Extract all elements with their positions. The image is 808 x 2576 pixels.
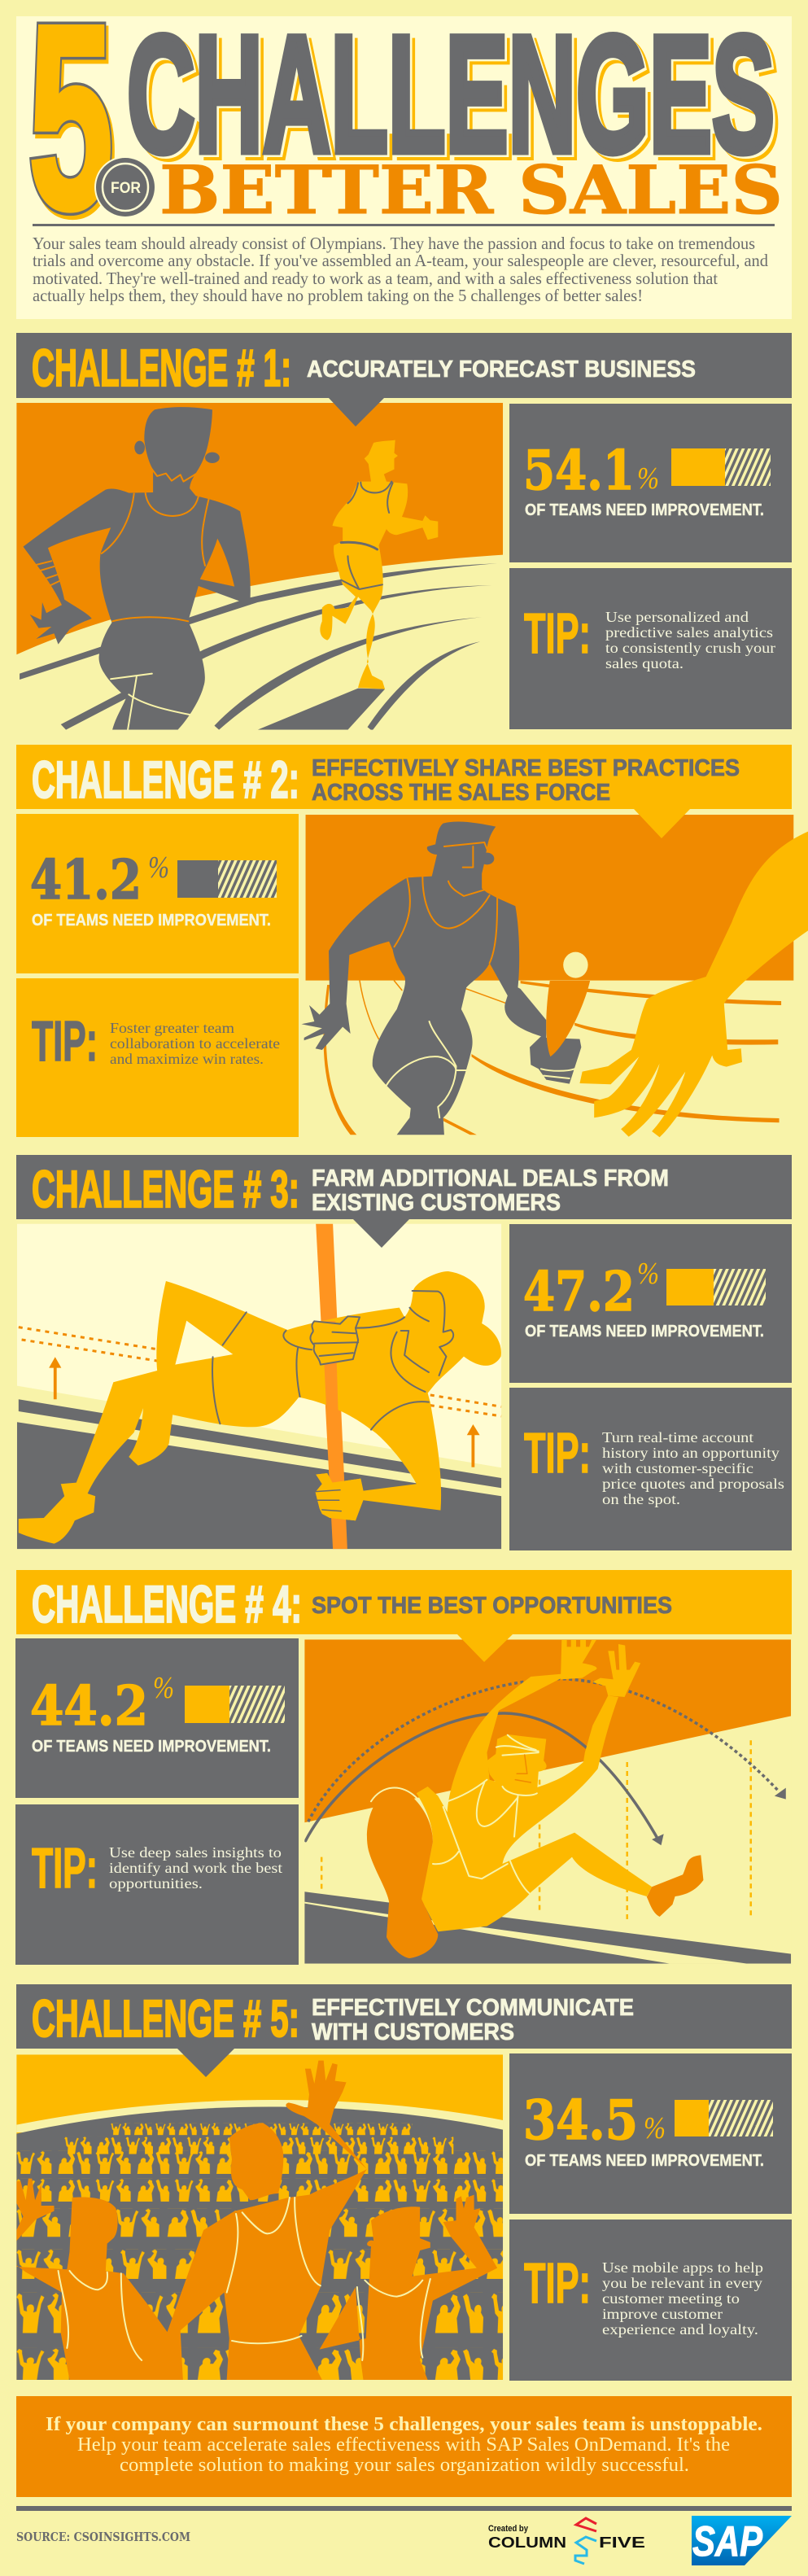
section: challenge 3: [16, 1155, 792, 1550]
header band: [16, 333, 792, 426]
hand reaching: [579, 832, 808, 1137]
illustration: runners: [16, 403, 503, 731]
big number 5: [28, 0, 116, 268]
panel: stat: %: [637, 461, 659, 496]
panel: stat: 41.2: [30, 848, 142, 912]
panel: stat: %: [637, 1257, 659, 1291]
panel: conclusion: Help your team accelerate sales effectiveness with SAP Sales OnDemand. It's the: [77, 2434, 730, 2456]
panel: tip: Use deep sales insights to: [109, 1844, 282, 1861]
panel: stat: [16, 814, 299, 973]
panel: tip: and maximize win rates.: [110, 1051, 264, 1067]
icon: arrows: [49, 1357, 480, 1467]
subheading: EFFECTIVELY SHARE BEST PRACTICES: [312, 755, 740, 781]
panel: tip: Foster greater team: [110, 1020, 234, 1036]
heading: CHALLENGE # 2:: [32, 750, 299, 809]
panel: stat: [509, 1224, 792, 1383]
heading: CHALLENGE # 3:: [32, 1160, 299, 1218]
panel: tip: customer meeting to: [602, 2290, 740, 2307]
subheading: SPOT THE BEST OPPORTUNITIES: [312, 1593, 672, 1619]
panel: stat: OF TEAMS NEED IMPROVEMENT.: [32, 1737, 271, 1756]
subheading: EFFECTIVELY COMMUNICATE: [312, 1995, 634, 2021]
panel: header: [16, 0, 792, 319]
panel: tip: predictive sales analytics: [605, 624, 773, 641]
panel: conclusion: complete solution to making your sales organization wildly successful.: [120, 2455, 689, 2476]
panel: tip: [15, 1804, 299, 1965]
panel: tip: Turn real-time account: [602, 1429, 753, 1445]
subheading: ACROSS THE SALES FORCE: [312, 780, 610, 806]
source: SOURCE: CSOINSIGHTS.COM: [16, 2530, 190, 2544]
logo: sap: SAP: [692, 2518, 762, 2565]
panel: tip: TIP:: [32, 1836, 98, 1900]
section: challenge 2: [16, 745, 808, 1137]
panel: stat: [509, 2053, 792, 2214]
panel: stat: OF TEAMS NEED IMPROVEMENT.: [525, 2151, 764, 2170]
panel: tip: collaboration to accelerate: [110, 1035, 280, 1052]
panel: stat: [509, 404, 792, 562]
panel: tip: to consistently crush your: [605, 640, 775, 656]
panel: tip: identify and work the best: [109, 1860, 282, 1876]
panel: tip: Use personalized and: [605, 609, 749, 625]
panel: conclusion: If your company can surmount these 5 challenges, your sales team is unstoppable.: [46, 2414, 762, 2435]
panel: tip: improve customer: [602, 2306, 723, 2322]
subheading: WITH CUSTOMERS: [312, 2019, 514, 2045]
heading: CHALLENGE # 5:: [32, 1989, 299, 2048]
header band: [16, 1984, 792, 2077]
panel: stat: %: [153, 1671, 174, 1705]
panel: tip: [16, 978, 299, 1137]
panel: tip: you be relevant in every: [602, 2275, 762, 2291]
intro text: Your sales team should already consist of Olympians. They have the passion and focus to take on tremendous: [33, 234, 755, 253]
logo: column five: FIVE: [599, 2534, 645, 2551]
panel: stat: %: [644, 2111, 666, 2145]
intro text: actually helps them, they should have no problem taking on the 5 challenges of better sales!: [33, 286, 643, 305]
panel: stat: 47.2: [523, 1260, 635, 1323]
illustration: relay: [301, 815, 808, 1137]
panel: tip: TIP:: [32, 1009, 98, 1073]
logo: column five: [488, 2518, 645, 2564]
panel: tip: TIP:: [524, 601, 591, 665]
logo: column five: Created by: [488, 2524, 529, 2534]
panel: tip: [509, 568, 792, 729]
winners: [16, 2061, 497, 2380]
panel: tip: opportunities.: [109, 1875, 203, 1892]
header band: [16, 745, 792, 838]
panel: stat: OF TEAMS NEED IMPROVEMENT.: [32, 911, 271, 929]
illustration: long jump: [304, 1639, 791, 1964]
crowd: [16, 2123, 503, 2380]
heading: CHALLENGE # 1:: [32, 339, 291, 397]
panel: stat: %: [148, 851, 169, 885]
subheading: EXISTING CUSTOMERS: [312, 1190, 561, 1216]
arrow: jump arc: [306, 1713, 664, 1845]
panel: stat: 54.1: [523, 439, 635, 502]
icon: baton: [546, 952, 590, 1056]
badge: for: FOR: [111, 180, 141, 197]
panel: tip: TIP:: [524, 2251, 591, 2315]
panel: stat: 44.2: [30, 1674, 148, 1738]
subheading: [312, 755, 740, 806]
panel: tip: price quotes and proposals: [602, 1476, 784, 1492]
panel: stat: 34.5: [523, 2088, 638, 2152]
logo: column five: COLUMN: [488, 2534, 566, 2551]
panel: stat: [15, 1638, 299, 1798]
header band: [16, 1570, 792, 1662]
section: challenge 5: [16, 1984, 792, 2381]
subheading: [312, 1995, 634, 2045]
subtitle: better sales: BETTER SALES: [159, 152, 783, 230]
illustration: crowd and winners: [16, 2054, 503, 2380]
panel: tip: [509, 2220, 792, 2381]
subheading: ACCURATELY FORECAST BUSINESS: [307, 356, 696, 383]
subheading: [312, 1166, 669, 1216]
panel: tip: TIP:: [524, 1421, 591, 1485]
panel: tip: experience and loyalty.: [602, 2321, 758, 2338]
section: challenge 1: [16, 333, 792, 731]
panel: conclusion: [16, 2396, 792, 2497]
panel: tip: sales quota.: [605, 655, 684, 671]
panel: stat: OF TEAMS NEED IMPROVEMENT.: [525, 501, 764, 519]
panel: stat: OF TEAMS NEED IMPROVEMENT.: [525, 1322, 764, 1340]
panel: tip: Use mobile apps to help: [602, 2259, 763, 2276]
jumper: [367, 1640, 703, 1958]
badge: for: [94, 156, 156, 218]
panel: tip: on the spot.: [602, 1491, 680, 1507]
subheading: FARM ADDITIONAL DEALS FROM: [312, 1166, 669, 1192]
panel: tip: history into an opportunity: [602, 1445, 780, 1461]
panel: tip: with customer-specific: [602, 1460, 753, 1476]
intro text: motivated. They're well-trained and ready to work as a team, and with a sales effectiveness solution that: [33, 269, 718, 288]
arrow: dotted arc: [308, 1679, 786, 1822]
header band: [16, 1155, 792, 1248]
section: challenge 4: [15, 1570, 792, 1965]
heading: CHALLENGE # 4:: [32, 1575, 302, 1634]
intro text: trials and overcome any obstacle. If you've assembled an A-team, your salespeople are clever, resourceful, and: [33, 251, 768, 270]
intro text: [33, 234, 768, 305]
panel: tip: [509, 1388, 792, 1550]
illustration: pole vault: [17, 1224, 501, 1549]
